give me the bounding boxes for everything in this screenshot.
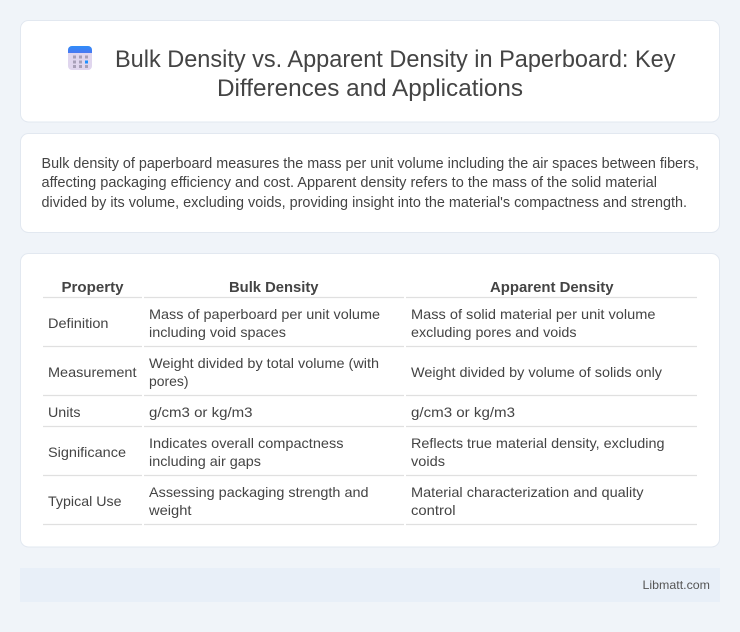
title: Bulk Density vs. Apparent Density in Paperboard: Key [115,46,676,73]
table row: significance: Indicates overall compactness [149,435,344,451]
footer [20,568,720,602]
table row: significance: Significance [48,444,126,460]
table row: measurement: pores) [149,373,188,389]
text block: description: Bulk density of paperboard measures the mass per unit volume including the air spaces between fibers, [42,156,699,172]
table row: typical use: weight [148,502,192,518]
table header row [62,280,614,296]
table row: typical use: control [411,502,456,518]
table row: typical use: Material characterization and quality [411,484,644,500]
table row: units: Units [48,404,80,420]
panel: header [20,20,720,122]
table row: definition [48,306,656,340]
text block: description: divided by its volume, excluding voids, providing insight into the material's compactness and strength. [42,195,687,211]
text block: description: affecting packaging efficiency and cost. Apparent density refers to the mass of the solid material [42,175,657,191]
table header row: Apparent Density [490,280,614,296]
table row: units [48,404,515,420]
table header row: Bulk Density [229,280,318,296]
panel: comparison table [20,254,720,547]
table row: significance: voids [411,453,445,469]
table header row: Property [62,280,124,296]
icon: calendar grid [68,46,92,70]
table row: definition: Definition [48,315,108,331]
title: Differences and Applications [217,75,523,102]
text block: description [42,156,699,211]
table row: measurement: Weight divided by total volume (with [149,355,379,371]
panel: description [20,134,720,232]
table row: significance: Reflects true material density, excluding [411,435,664,451]
table row: definition: Mass of solid material per unit volume [411,306,656,322]
table row: definition: excluding pores and voids [411,324,576,340]
table row: units: g/cm3 or kg/m3 [411,404,515,420]
table row: significance [48,435,664,469]
table row: definition: Mass of paperboard per unit volume [149,306,380,322]
footer: Libmatt.com [642,578,710,592]
table row: measurement: Weight divided by volume of solids only [411,364,662,380]
table row: units: g/cm3 or kg/m3 [149,404,253,420]
table row: significance: including air gaps [149,453,261,469]
table row: typical use: Typical Use [48,493,122,509]
title [115,46,676,102]
table row: typical use [48,484,644,518]
table row: typical use: Assessing packaging strength and [149,484,368,500]
table row: measurement [48,355,662,389]
table row: measurement: Measurement [48,364,137,380]
table row: definition: including void spaces [149,324,286,340]
